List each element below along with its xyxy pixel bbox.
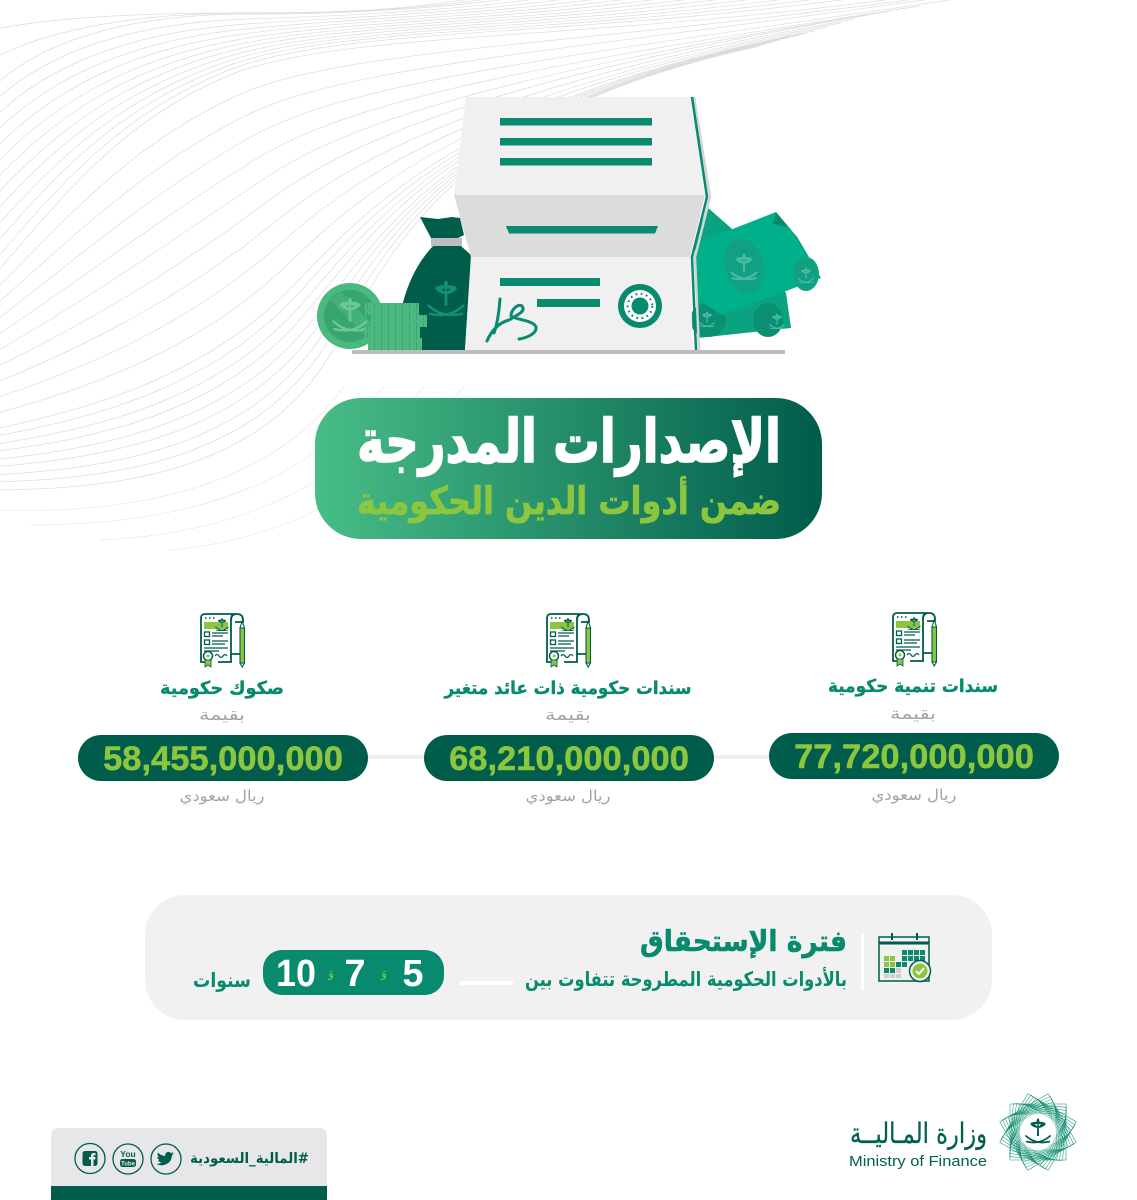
value pill: 77,720,000,000 (794, 738, 1034, 776)
subtitle text: ضمن أدوات الدين الحكومية (357, 476, 781, 524)
logo english name: Ministry of Finance (849, 1153, 987, 1170)
icon: youtube: Tube (121, 1162, 136, 1168)
logo arabic name: وزارة المـاليــة (850, 1117, 987, 1150)
label: value: بقيمة (890, 704, 936, 723)
years pill: 7 (344, 953, 366, 995)
icon: facebook (75, 1144, 105, 1174)
icon: youtube (113, 1144, 143, 1174)
icon: coin stack (365, 303, 427, 350)
value pill: 68,210,000,000 (449, 740, 689, 778)
icon: signature (487, 299, 536, 341)
heading: صكوك حكومية (160, 678, 284, 699)
heading: سندات تنمية حكومية (828, 676, 998, 697)
panel: development bonds (769, 613, 1059, 805)
years pill (263, 950, 444, 995)
divider (861, 933, 864, 990)
label: currency: ريال سعودي (180, 787, 264, 806)
icon: bond document (201, 614, 244, 667)
value pill (424, 735, 714, 781)
label: value: بقيمة (199, 705, 245, 724)
panel: floating rate bonds (424, 614, 714, 806)
shelf line (352, 350, 785, 354)
label: currency: ريال سعودي (526, 787, 610, 806)
title banner (315, 398, 822, 539)
background wave lines (0, 0, 980, 550)
icon: seal (618, 284, 662, 328)
sub text: بالأدوات الحكومية المطروحة تتفاوت بين (525, 966, 847, 991)
label: currency: ريال سعودي (872, 786, 956, 805)
heading: فترة الإستحقاق (640, 924, 847, 958)
icon: coin (317, 283, 383, 349)
years pill: 10 (276, 953, 316, 995)
heading: سندات حكومية ذات عائد متغير (444, 678, 692, 699)
panel: maturity period (145, 895, 992, 1020)
icon: calendar (879, 933, 930, 982)
icon: money bag (398, 217, 471, 350)
dash (460, 981, 513, 985)
icon: youtube: You (120, 1149, 136, 1159)
logo emblem (999, 1093, 1077, 1171)
label: value: بقيمة (545, 705, 591, 724)
logo: Ministry of Finance (849, 1093, 1077, 1171)
icon: banknotes (690, 207, 821, 338)
footer social panel (51, 1128, 327, 1200)
value pill: 58,455,000,000 (103, 740, 343, 778)
hashtag: #المالية_السعودية (190, 1151, 309, 1167)
illustration: document, money bag, coins and banknotes (317, 97, 821, 354)
icon: bond document (547, 614, 590, 667)
connector lines (368, 755, 769, 759)
title text: الإصدارات المدرجة (357, 407, 781, 477)
years pill: وَ (327, 966, 334, 981)
icon: bond document (893, 613, 936, 666)
label: years: سنوات (193, 968, 251, 992)
years pill: 5 (402, 953, 424, 995)
value pill (769, 733, 1059, 779)
years pill: وَ (380, 966, 387, 981)
document (454, 97, 710, 350)
icon: twitter (151, 1144, 181, 1174)
panel: sukuk (78, 614, 368, 806)
value pill (78, 735, 368, 781)
